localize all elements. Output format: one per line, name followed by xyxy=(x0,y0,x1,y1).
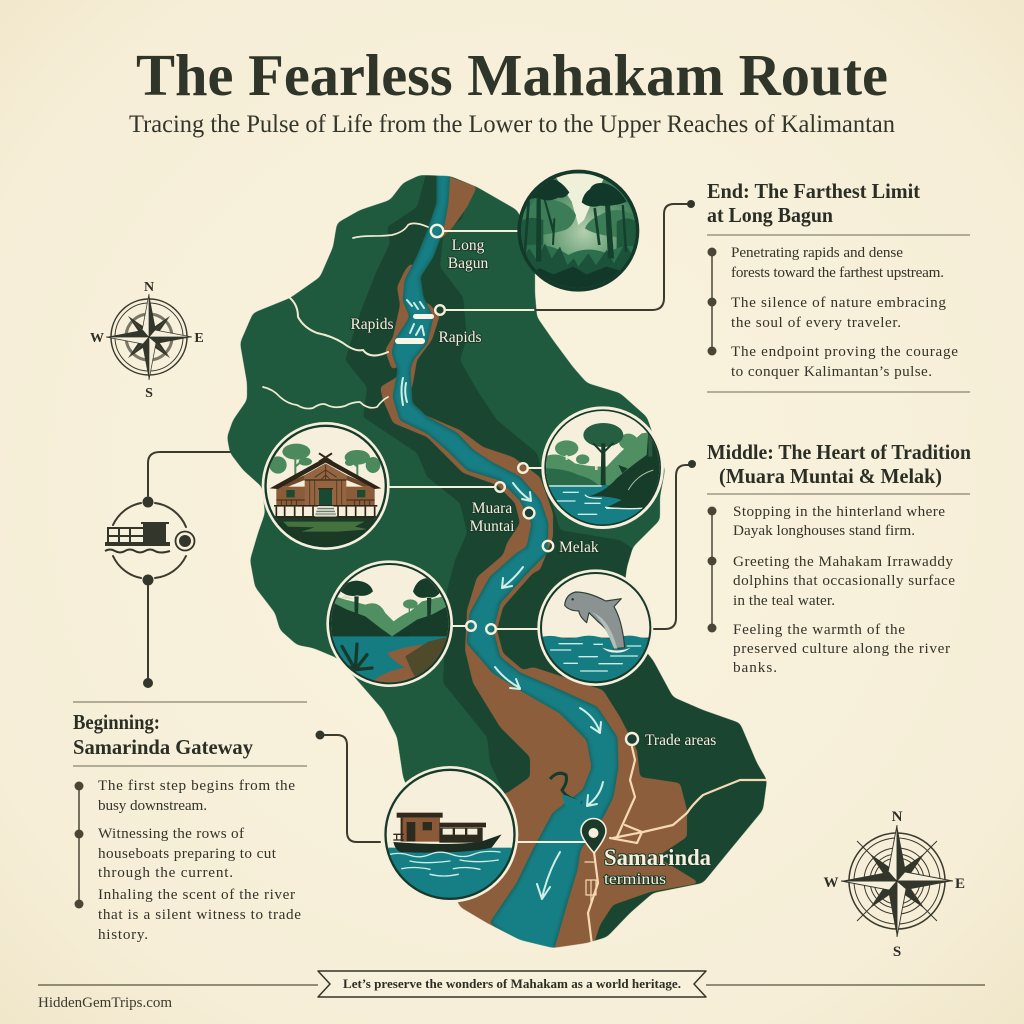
connector: beginning panel xyxy=(316,730,380,842)
location nodes xyxy=(431,225,638,745)
bullet list: beginning: history. xyxy=(98,926,148,943)
bullet list: middle: Stopping in the hinterland where xyxy=(733,503,945,520)
heading: beginning: Beginning: xyxy=(73,710,160,734)
heading: beginning: Samarinda Gateway xyxy=(73,735,253,759)
compass: northwest xyxy=(90,280,204,401)
bullet list: end: The endpoint proving the courage xyxy=(731,343,958,360)
heading: middle: Middle: The Heart of Tradition xyxy=(707,440,971,464)
bullet list: middle xyxy=(708,503,955,676)
bullet list: beginning: through the current. xyxy=(98,864,233,881)
map labels: Bagun xyxy=(448,255,488,272)
bullet list: middle: Dayak longhouses stand firm. xyxy=(733,522,915,539)
bullet list: beginning xyxy=(74,777,301,943)
bullet list: middle: in the teal water. xyxy=(733,592,835,609)
illustration: Irrawaddy dolphin xyxy=(537,569,654,686)
bullet list: end: forests toward the farthest upstream. xyxy=(731,264,944,281)
compass: southeast: S xyxy=(893,944,901,960)
bullet list: beginning: houseboats preparing to cut xyxy=(98,845,277,862)
bullet list: beginning: that is a silent witness to trade xyxy=(98,906,301,923)
bullet list: beginning: Inhaling the scent of the river xyxy=(98,886,295,903)
footer ribbon: Let’s preserve the wonders of Mahakam as a world heritage. xyxy=(343,976,681,991)
bullet list: middle: Feeling the warmth of the xyxy=(733,621,905,638)
footer ribbon xyxy=(38,971,985,997)
illustration: river and forest xyxy=(541,406,668,532)
icon: boat in route ring with connector xyxy=(105,452,230,688)
bullet list: middle: preserved culture along the river xyxy=(733,640,950,657)
title: The Fearless Mahakam Route xyxy=(136,42,888,108)
compass: southeast xyxy=(824,809,965,960)
compass: northwest: E xyxy=(194,331,204,346)
bullet list: end: The silence of nature embracing xyxy=(731,294,946,311)
panel: beginning, Samarinda gateway xyxy=(73,702,307,943)
rapids foam xyxy=(395,314,434,344)
panel: end at Long Bagun xyxy=(707,179,970,392)
map labels: Rapids xyxy=(438,329,482,346)
bullet list: middle: banks. xyxy=(733,659,777,676)
map labels: Samarinda xyxy=(604,845,711,870)
bullet list: middle: dolphins that occasionally surface xyxy=(733,572,955,589)
compass: southeast: E xyxy=(955,876,965,892)
map labels: Muara xyxy=(472,500,512,517)
map labels xyxy=(350,237,716,888)
map labels: Trade areas xyxy=(645,732,716,749)
heading: middle: (Muara Muntai & Melak) xyxy=(719,464,942,488)
illustration: riverside jungle xyxy=(326,560,453,690)
heading: beginning xyxy=(73,710,253,759)
subtitle: Tracing the Pulse of Life from the Lower to the Upper Reaches of Kalimantan xyxy=(129,111,895,138)
map labels: Melak xyxy=(559,539,599,556)
land base xyxy=(227,175,767,948)
bullet list: end: the soul of every traveler. xyxy=(731,314,901,331)
heading: middle xyxy=(707,440,971,488)
illustration: upstream forest xyxy=(517,170,639,295)
map labels: Muntai xyxy=(470,518,515,535)
compass: northwest: W xyxy=(90,331,104,346)
map: Mahakam river land mass xyxy=(227,175,767,948)
icon: location pin xyxy=(581,818,606,853)
bullet list: beginning: The first step begins from the xyxy=(98,777,295,794)
compass: northwest: N xyxy=(144,280,154,295)
map labels: Rapids xyxy=(350,316,394,333)
panel: middle, heart of tradition xyxy=(707,440,971,676)
river water xyxy=(392,170,618,952)
dark forest band xyxy=(346,175,766,940)
compass: southeast: N xyxy=(892,809,903,825)
heading: end: at Long Bagun xyxy=(707,203,833,227)
map labels: terminus xyxy=(604,871,666,888)
map labels: Long xyxy=(452,237,485,254)
brown river banks xyxy=(380,170,700,950)
tributaries xyxy=(263,223,770,945)
connector: end panel xyxy=(535,200,695,310)
bullet list: end: Penetrating rapids and dense xyxy=(731,244,903,261)
illustration: Dayak longhouse xyxy=(262,422,390,550)
connector lines on map xyxy=(389,231,585,842)
footer credit: HiddenGemTrips.com xyxy=(38,995,172,1011)
bullet list: beginning: Witnessing the rows of xyxy=(98,825,245,842)
river inlet xyxy=(550,773,582,802)
heading: end xyxy=(707,179,920,227)
bullet list: end: to conquer Kalimantan’s pulse. xyxy=(731,363,932,380)
bullet list: beginning: busy downstream. xyxy=(98,797,207,814)
bullet list: end xyxy=(708,244,958,380)
compass: southeast: W xyxy=(824,875,838,891)
compass: northwest: S xyxy=(145,386,153,401)
connector: middle panel xyxy=(654,460,696,629)
bullet list: middle: Greeting the Mahakam Irrawaddy xyxy=(733,553,953,570)
flow arrows xyxy=(495,483,603,899)
illustration: houseboat xyxy=(382,766,518,904)
heading: end: End: The Farthest Limit xyxy=(707,179,920,203)
